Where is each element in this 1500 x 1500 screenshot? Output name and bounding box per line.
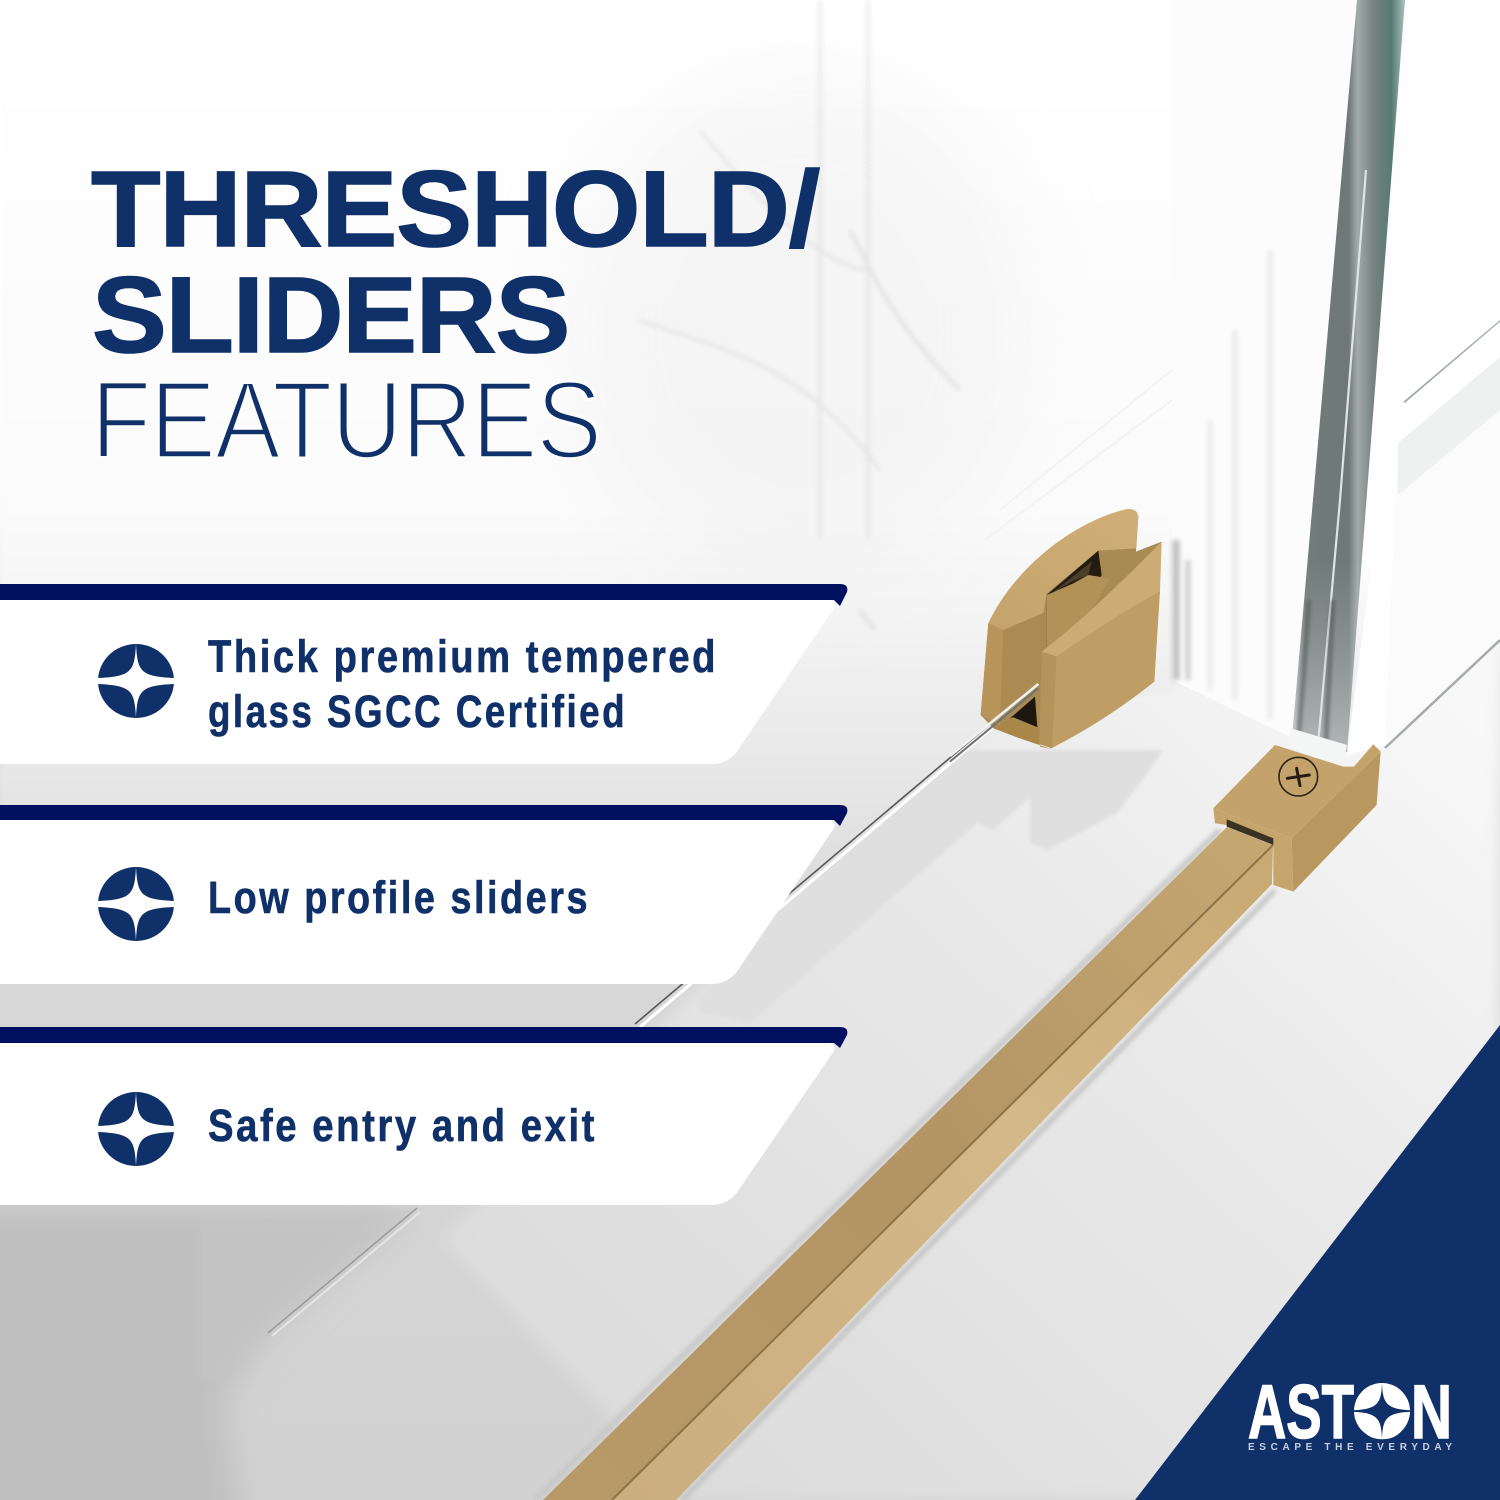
icon: star bullet — [98, 1092, 174, 1166]
slider back plate — [988, 509, 1138, 630]
icon: gold end block with screw — [1213, 744, 1381, 892]
title line: sliders: SLIDERS — [92, 254, 569, 375]
feature text — [208, 631, 718, 737]
logo: Aston: AST — [1248, 1370, 1354, 1455]
frosted glass panel and metal strip — [1172, 0, 1500, 765]
feature text: glass SGCC Certified — [208, 686, 627, 737]
blue corner triangle — [1135, 1025, 1500, 1500]
title — [91, 148, 819, 482]
rail soft shadows — [535, 830, 1220, 1500]
feature text: Thick premium tempered — [208, 631, 718, 682]
icon: star bullet — [98, 867, 174, 941]
slider silhouette backing — [981, 517, 1162, 748]
panel: tempered glass feature — [0, 584, 847, 764]
title line: threshold: THRESHOLD/ — [91, 148, 819, 269]
panel: safe entry feature — [0, 1027, 847, 1205]
slider front plate — [1042, 542, 1162, 657]
slider floor reflection — [700, 750, 1163, 1023]
panel: low profile feature — [0, 805, 847, 984]
gold threshold rail — [543, 827, 1273, 1500]
icon: star bullet — [98, 644, 174, 718]
feature text: Safe entry and exit — [208, 1100, 597, 1151]
title line: features: FEATURES — [91, 359, 601, 482]
logo: Aston: O — [1355, 1370, 1410, 1455]
feature text: Low profile sliders — [208, 872, 590, 923]
tagline: ESCAPE THE EVERYDAY — [1248, 1442, 1452, 1453]
logo: Aston: N — [1411, 1370, 1452, 1455]
glass pane edge — [950, 688, 1038, 762]
icon: gold slider bracket — [950, 509, 1162, 762]
